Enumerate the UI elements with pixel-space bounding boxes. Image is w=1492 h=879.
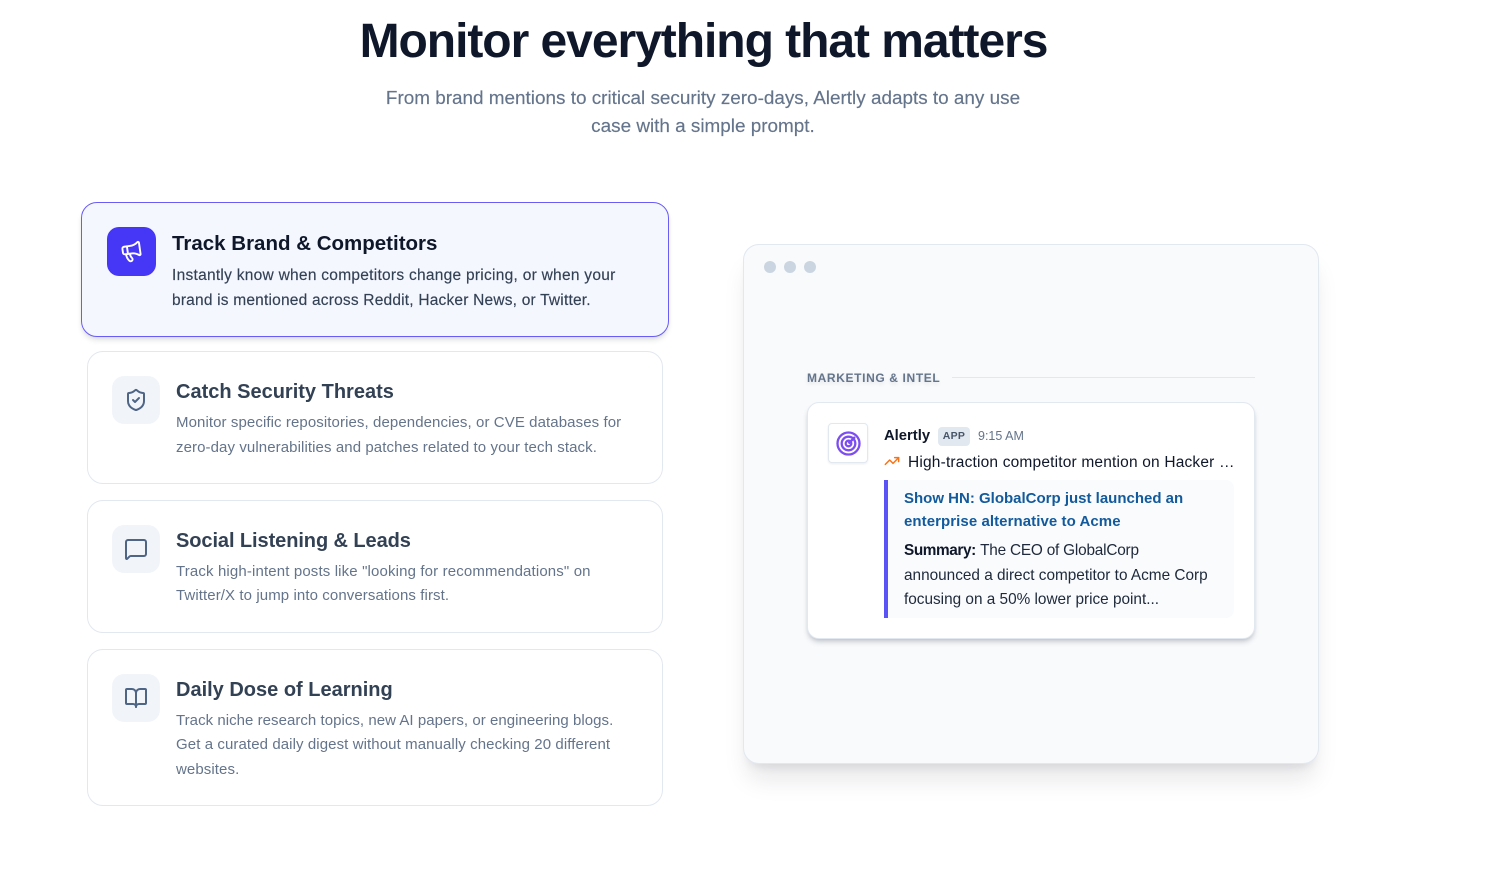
description: Instantly know when competitors change pricing, or when your [172, 267, 616, 284]
description: zero-day vulnerabilities and patches related to your tech stack. [176, 439, 597, 456]
timestamp: 9:15 AM [978, 429, 1024, 443]
icon: megaphone [107, 227, 156, 276]
summary text: focusing on a 50% lower price point... [904, 591, 1159, 608]
panel: social listening and leads [87, 500, 663, 633]
description: Get a curated daily digest without manually checking 20 different [176, 736, 610, 753]
app badge: APP [943, 430, 965, 442]
link title: Show HN: GlobalCorp just launched an [904, 490, 1183, 507]
icon: shield [112, 376, 160, 424]
summary text: Summary: The CEO of GlobalCorp [904, 542, 1139, 559]
heading: Daily Dose of Learning [176, 679, 393, 701]
icon: open book [112, 674, 160, 722]
heading: Social Listening & Leads [176, 530, 411, 552]
sender name: Alertly [884, 428, 930, 444]
description: Twitter/X to jump into conversations first. [176, 587, 449, 604]
panel: alert message card [807, 402, 1255, 639]
panel: daily dose of learning [87, 649, 663, 806]
subtitle [386, 88, 1020, 137]
description: Monitor specific repositories, dependencies, or CVE databases for [176, 414, 621, 431]
summary text [904, 542, 1208, 608]
description [176, 563, 591, 604]
title: Monitor everything that matters [360, 15, 1047, 68]
description: Track high-intent posts like "looking for recommendations" on [176, 563, 591, 580]
link title [904, 490, 1183, 530]
panel: track brand and competitors (active) [81, 202, 669, 337]
quoted summary block [884, 480, 1234, 618]
summary text: announced a direct competitor to Acme Corp [904, 566, 1208, 584]
section label: MARKETING & INTEL [807, 371, 940, 385]
description: Track niche research topics, new AI papers, or engineering blogs. [176, 712, 613, 729]
description [172, 267, 616, 309]
description: brand is mentioned across Reddit, Hacker News, or Twitter. [172, 292, 591, 309]
app badge [938, 427, 970, 446]
panel: catch security threats [87, 351, 663, 484]
alert headline: High-traction competitor mention on Hacker … [908, 454, 1235, 471]
icon: chat bubble [112, 525, 160, 573]
description [176, 712, 613, 778]
description: websites. [176, 761, 239, 778]
icon: radar logo [828, 423, 868, 463]
heading: Track Brand & Competitors [172, 232, 437, 255]
panel: browser preview window [743, 244, 1319, 764]
subtitle: From brand mentions to critical security zero-days, Alertly adapts to any use [386, 88, 1020, 109]
heading: Catch Security Threats [176, 381, 394, 403]
description [176, 414, 621, 456]
link title: enterprise alternative to Acme [904, 513, 1121, 530]
window controls [764, 261, 816, 273]
icon: trending up arrow [884, 456, 900, 466]
subtitle: case with a simple prompt. [591, 116, 815, 137]
